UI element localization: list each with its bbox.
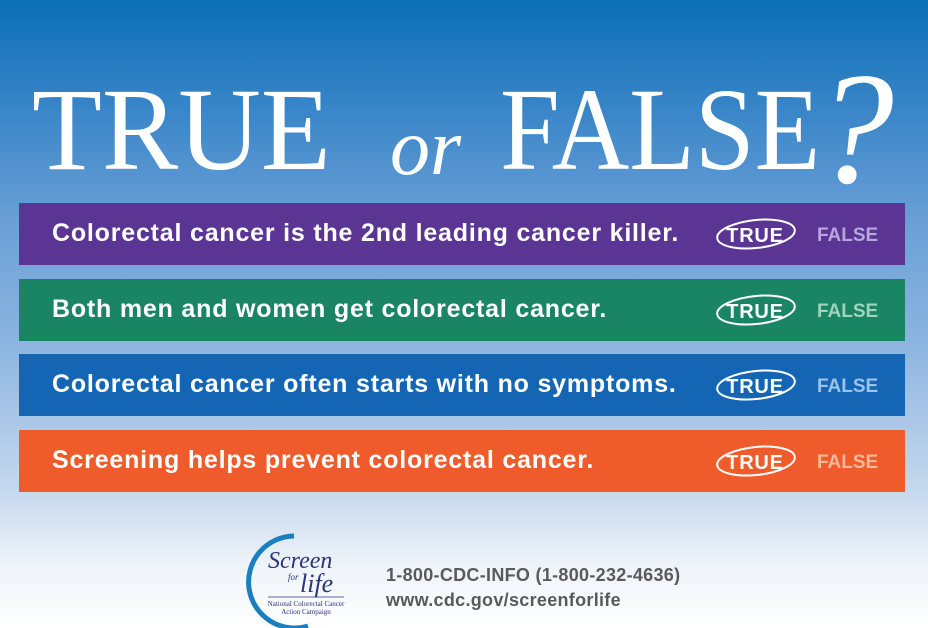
icon: circled true: TRUE bbox=[726, 452, 784, 474]
bar 1: FALSE bbox=[817, 225, 878, 246]
logo: Screen for Life: Screen bbox=[268, 548, 332, 574]
icon: circled true bbox=[716, 218, 796, 250]
bar 1 bbox=[19, 203, 905, 265]
contact text bbox=[386, 565, 680, 610]
title: or bbox=[390, 104, 461, 192]
title bbox=[32, 39, 894, 217]
icon: circled true: TRUE bbox=[726, 301, 784, 323]
bar 3: Colorectal cancer often starts with no symptoms. bbox=[52, 370, 677, 398]
bar 2 bbox=[19, 279, 905, 341]
bar 4: FALSE bbox=[817, 452, 878, 473]
logo: Screen for Life: life bbox=[300, 569, 333, 598]
icon: circled true: TRUE bbox=[726, 376, 784, 398]
logo: Screen for Life: for bbox=[288, 572, 299, 582]
title: ? bbox=[814, 39, 894, 217]
icon: circled true bbox=[716, 370, 796, 400]
logo: Screen for Life bbox=[246, 534, 345, 628]
title: FALSE bbox=[500, 64, 820, 195]
bar 4 bbox=[19, 430, 905, 492]
icon: circled true bbox=[716, 446, 796, 476]
bar 3 bbox=[19, 354, 905, 416]
bar 1: Colorectal cancer is the 2nd leading cancer killer. bbox=[52, 219, 679, 247]
title: TRUE bbox=[32, 64, 331, 195]
icon: circled true: TRUE bbox=[726, 225, 784, 247]
icon: circled true bbox=[716, 294, 796, 326]
bar 2: FALSE bbox=[817, 301, 878, 322]
logo: Screen for Life: National Colorectal Cancer bbox=[268, 600, 345, 608]
contact text: www.cdc.gov/screenforlife bbox=[386, 590, 621, 610]
bar 2: Both men and women get colorectal cancer. bbox=[52, 295, 607, 323]
bar 4: Screening helps prevent colorectal cancer. bbox=[52, 446, 594, 474]
bar 3: FALSE bbox=[817, 376, 878, 397]
contact text: 1-800-CDC-INFO (1-800-232-4636) bbox=[386, 565, 680, 585]
logo: Screen for Life: Action Campaign bbox=[281, 608, 331, 616]
